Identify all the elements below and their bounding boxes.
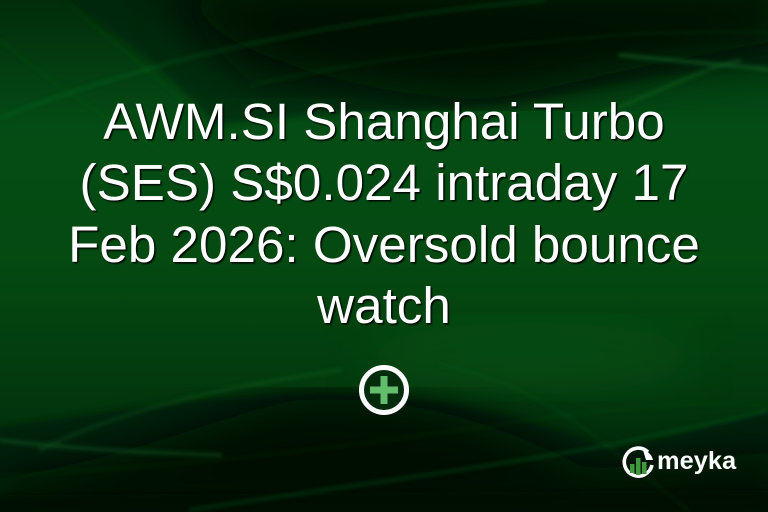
title: watch	[317, 277, 451, 334]
title	[68, 93, 700, 334]
logo text: meyka	[657, 447, 736, 475]
icon: logo mark	[622, 446, 654, 478]
title: Feb 2026: Oversold bounce	[68, 216, 700, 273]
icon: plus in circle	[359, 365, 409, 415]
title: (SES) S$0.024 intraday 17	[80, 154, 688, 211]
logo: meyka	[622, 446, 736, 478]
title: AWM.SI Shanghai Turbo	[103, 93, 665, 150]
